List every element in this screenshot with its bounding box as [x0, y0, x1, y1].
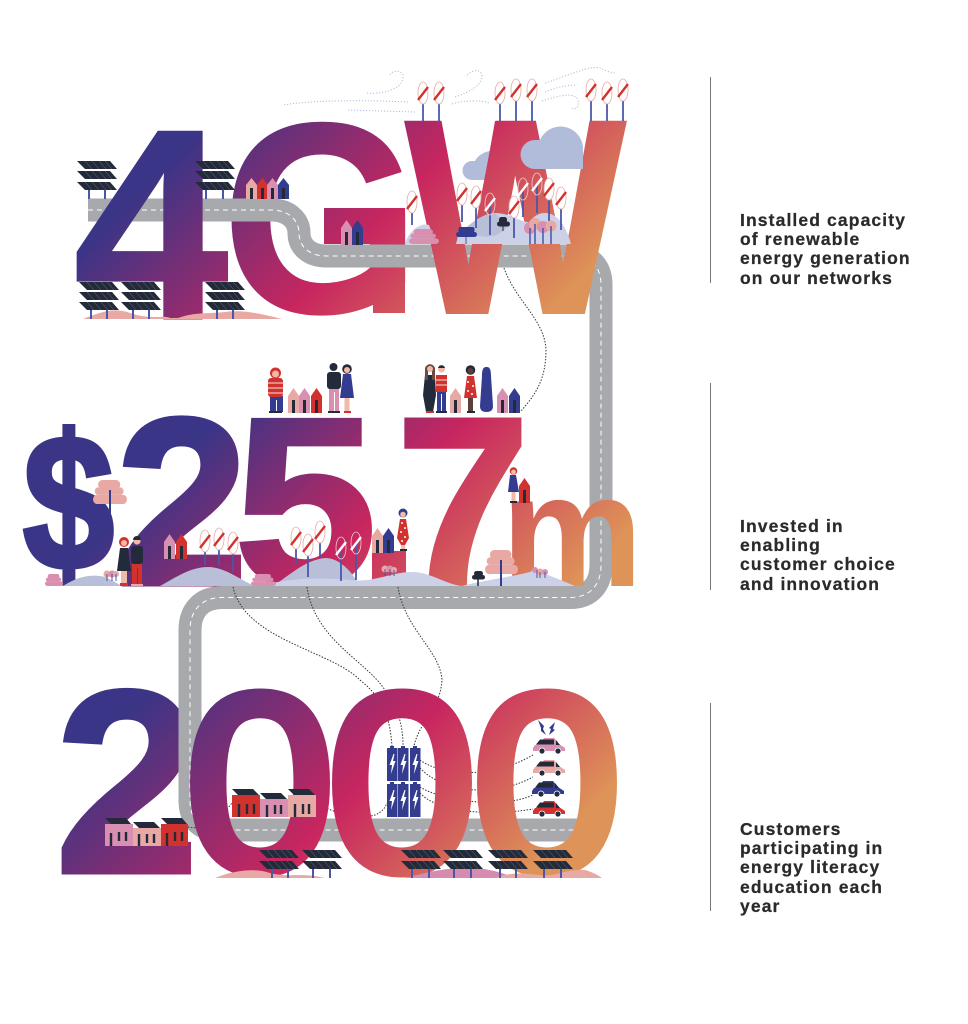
wires [188, 268, 546, 828]
solar panels row three [259, 850, 573, 878]
charge bolts [538, 720, 555, 735]
upper-right array [195, 161, 235, 199]
wind turbines row two [200, 521, 361, 581]
road [88, 210, 601, 830]
divider one [710, 77, 711, 283]
person: blue dress, red hair [508, 467, 519, 503]
person: black top, red trousers [131, 536, 143, 586]
caption three: participating in [740, 838, 883, 858]
numeral 2 of 257: 2 [116, 370, 248, 635]
divider three [710, 703, 711, 911]
caption two [740, 516, 896, 594]
caption three [740, 819, 883, 916]
divider two [710, 383, 711, 590]
caption three: education each [740, 877, 883, 897]
caption one: of renewable [740, 229, 860, 249]
numeral 2 of 2000: 2 [54, 635, 200, 929]
middle terrace [232, 789, 316, 817]
person: striped sweater [268, 368, 283, 413]
batteries [387, 746, 420, 817]
person: blue robe [480, 367, 493, 412]
left terrace [105, 818, 188, 846]
person: red spotted dress [464, 365, 477, 413]
letter m: m [501, 441, 643, 620]
caption two: enabling [740, 535, 821, 555]
numeral 5 of 257: 5 [234, 368, 377, 636]
wind turbines row one [407, 79, 628, 238]
trees row two [45, 480, 548, 586]
bottom pink hills [83, 310, 602, 878]
lower arrays [79, 282, 245, 319]
second zero: 0 [328, 643, 476, 922]
solar houses row three [105, 789, 316, 846]
caption three: year [740, 896, 780, 916]
numeral 4: 4 [74, 75, 230, 376]
first zero: 0 [186, 643, 334, 922]
digits in front of the road [74, 75, 643, 922]
caption one [740, 210, 911, 288]
block under house and figure [372, 551, 406, 581]
person: striped shirt, blue trousers [436, 365, 447, 413]
person: black dress, red hair [117, 537, 131, 586]
letter G: G [222, 68, 420, 370]
caption two: and innovation [740, 574, 880, 594]
wind lines [284, 67, 616, 112]
caption three: Customers [740, 819, 842, 839]
caption one: energy generation [740, 248, 911, 268]
letter W: W [406, 64, 627, 371]
caption one: Installed capacity [740, 210, 906, 230]
caption one: on our networks [740, 268, 893, 288]
small cloud [462, 150, 510, 180]
currency sign: $ [23, 395, 114, 610]
caption two: Invested in [740, 516, 844, 536]
people [117, 363, 519, 586]
third zero: 0 [473, 643, 621, 922]
person: dark shirt, pink trousers [327, 363, 341, 413]
caption three: energy literacy [740, 857, 880, 877]
person: blue dress [340, 364, 354, 413]
houses row two [164, 388, 530, 559]
upper-left array [77, 161, 117, 199]
hills row one [405, 213, 571, 244]
hills row two [63, 558, 575, 586]
numeral 7 of 257: 7 [396, 368, 530, 638]
person: red spotted dress, blue hair [397, 508, 409, 551]
cars [532, 738, 565, 817]
digits behind the road: G and row two numerals [23, 68, 530, 929]
houses row one [246, 178, 363, 245]
person: black outfit [423, 364, 436, 413]
solar panels row one [77, 161, 245, 319]
trees row one [409, 217, 556, 244]
caption two: customer choice [740, 554, 896, 574]
big cloud [520, 127, 583, 169]
